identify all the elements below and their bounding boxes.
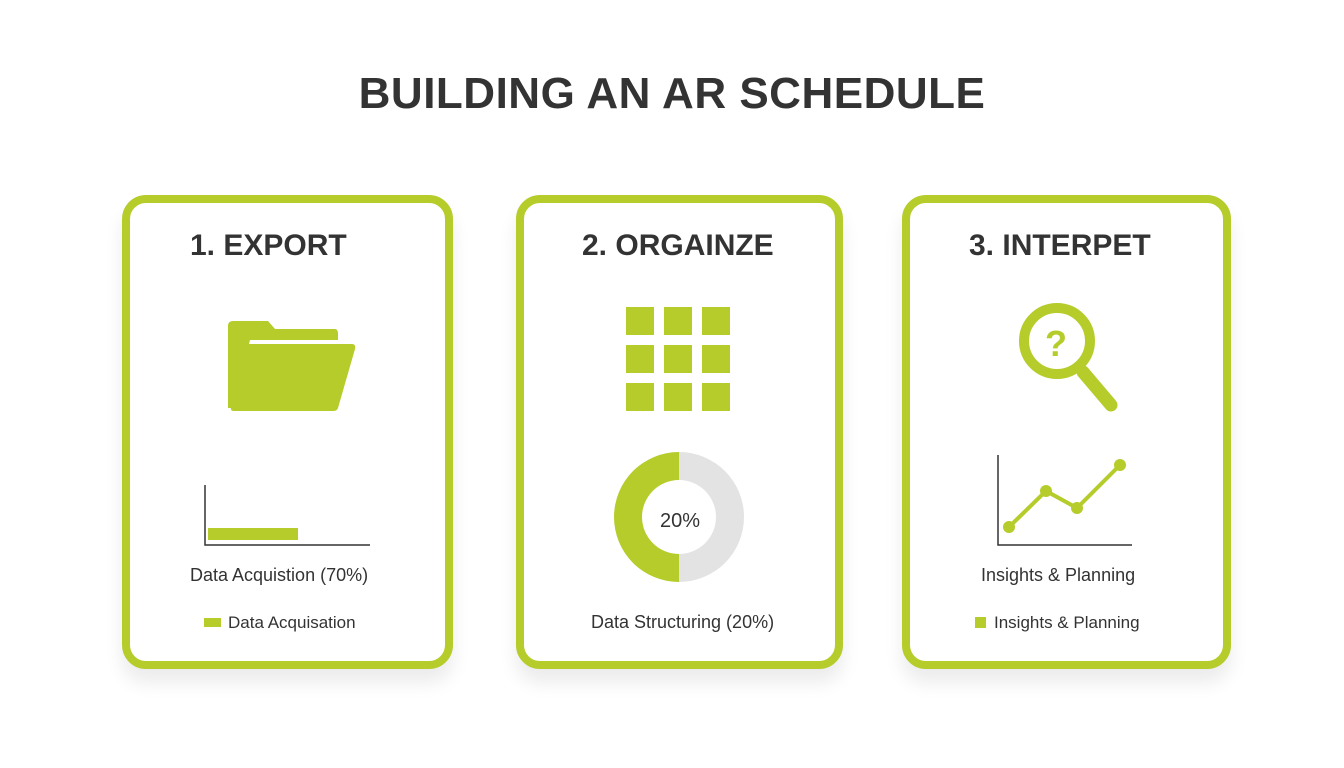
legend: interpret: Insights & Planning: [994, 613, 1140, 632]
heading: organize: 2. ORGAINZE: [582, 229, 774, 262]
line chart: [998, 455, 1132, 545]
icon: folder: [228, 321, 355, 411]
panel: export: [122, 195, 453, 669]
title: BUILDING AN AR SCHEDULE: [359, 69, 985, 118]
bar chart: export: [205, 485, 370, 545]
icon: magnifier: ?: [1045, 323, 1067, 364]
panel: interpret: [902, 195, 1231, 669]
panel: organize: [516, 195, 843, 669]
caption: organize: Data Structuring (20%): [591, 612, 774, 632]
donut chart: [614, 452, 744, 582]
donut chart: 20%: [660, 510, 700, 532]
icon: grid: [626, 307, 730, 411]
caption: interpret: Insights & Planning: [981, 565, 1135, 585]
caption: export: Data Acquistion (70%): [190, 565, 368, 585]
legend swatches: [204, 617, 986, 628]
icon: magnifier: [1024, 308, 1111, 405]
legend: export: Data Acquisation: [228, 613, 356, 632]
heading: interpret: 3. INTERPET: [969, 229, 1151, 262]
heading: export: 1. EXPORT: [190, 229, 347, 262]
